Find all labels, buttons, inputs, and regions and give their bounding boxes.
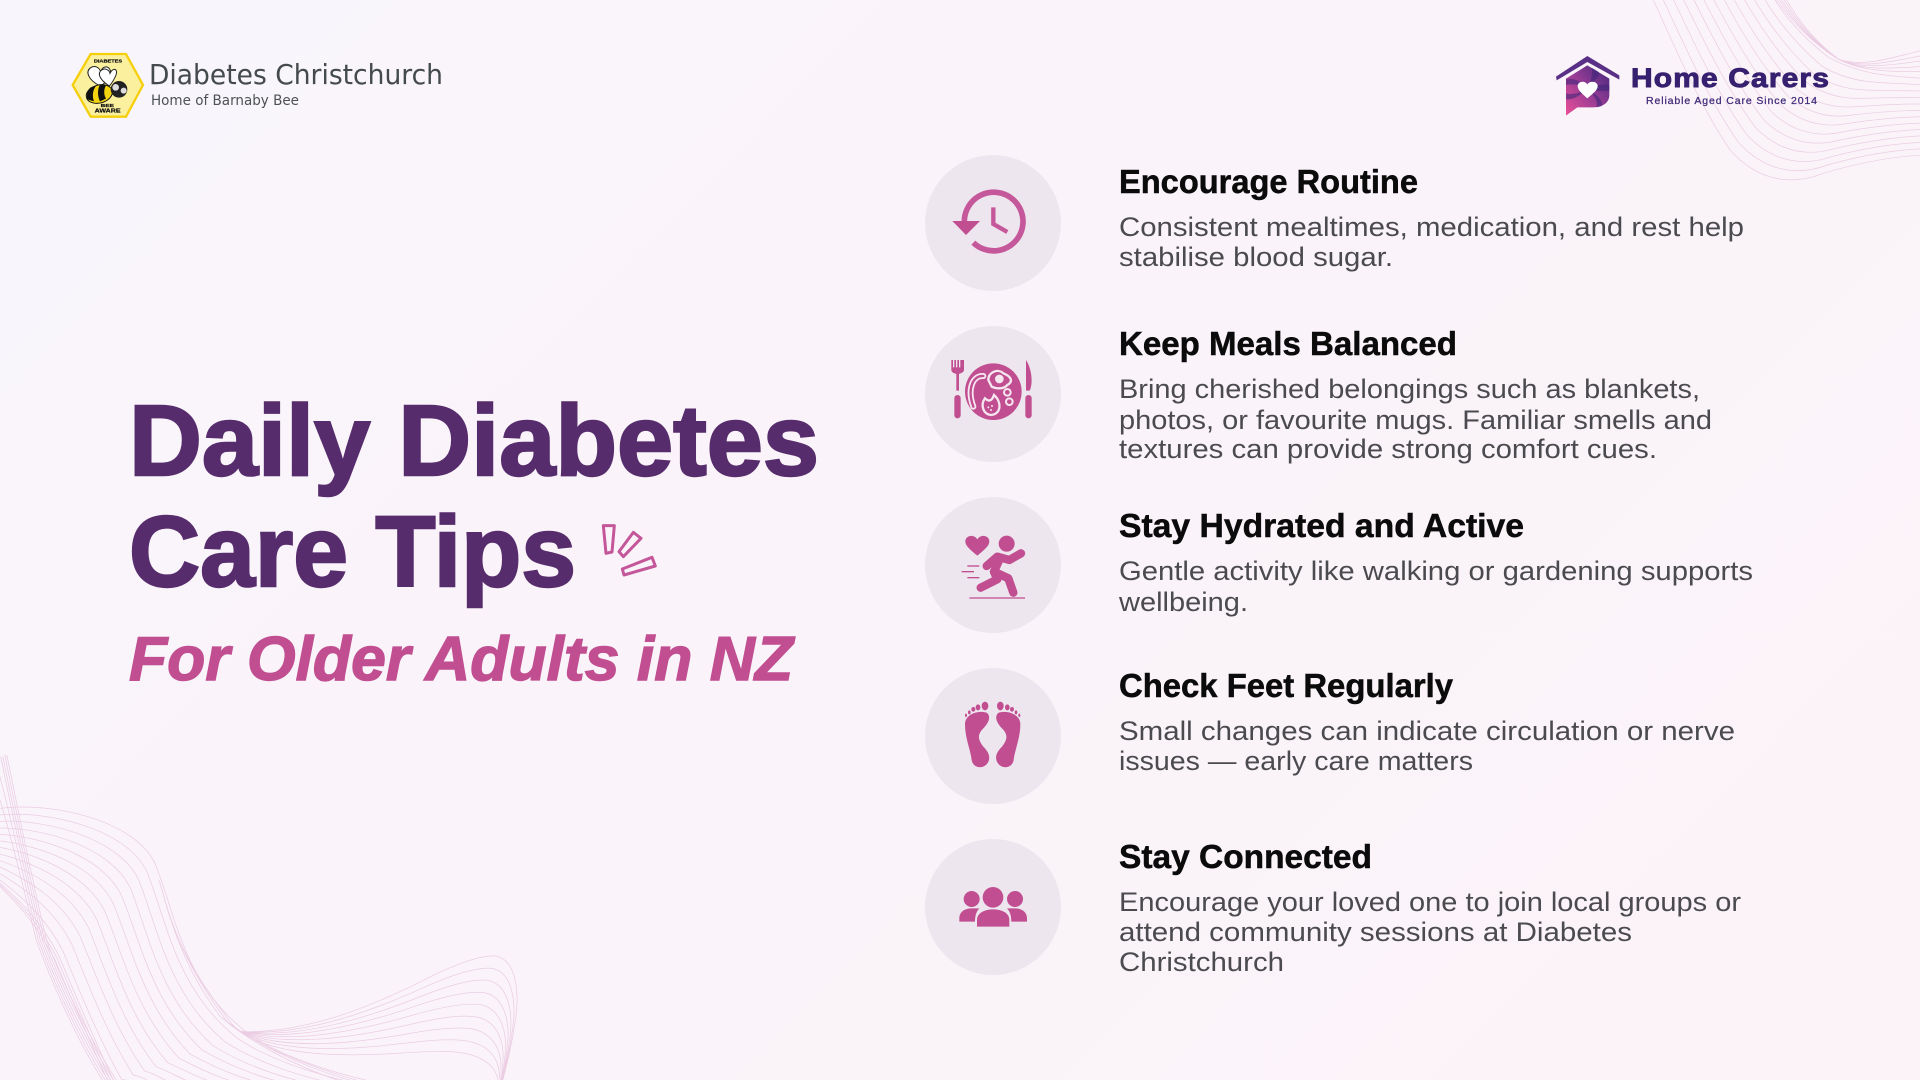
body text: issues — early care matters <box>1119 746 1473 776</box>
heading: Encourage Routine <box>1119 163 1418 200</box>
body text: Small changes can indicate circulation or nerve <box>1119 716 1735 746</box>
body text: Christchurch <box>1119 947 1284 977</box>
body text <box>1119 716 1735 776</box>
icon: group of people <box>925 839 1061 975</box>
title: Care Tips <box>129 496 576 608</box>
logo: Home Carers <box>1556 56 1830 116</box>
icon: runner with heart <box>925 497 1061 633</box>
icon: bee hexagon badge: AWARE <box>95 109 121 115</box>
background wave: bottom left <box>0 755 517 1080</box>
body text: Consistent mealtimes, medication, and rest help <box>1119 212 1744 242</box>
heading: Check Feet Regularly <box>1119 667 1454 704</box>
body text <box>1119 887 1741 977</box>
panel: stay hydrated and active <box>925 497 1753 633</box>
body text: stabilise blood sugar. <box>1119 242 1393 272</box>
heading: Keep Meals Balanced <box>1119 325 1457 362</box>
body text: photos, or favourite mugs. Familiar smells and <box>1119 405 1712 435</box>
icon: footprints <box>925 668 1061 804</box>
icon: plate with cutlery <box>925 326 1061 462</box>
title: Daily Diabetes <box>129 385 819 497</box>
panel: stay connected <box>925 838 1741 977</box>
icon: bee hexagon badge: DIABETES <box>94 59 123 65</box>
icon: sparkle accent <box>603 526 655 575</box>
panel: encourage routine <box>925 155 1744 291</box>
body text: Encourage your loved one to join local groups or <box>1119 887 1741 917</box>
heading: Stay Connected <box>1119 838 1372 875</box>
background wave: top right <box>1653 0 1920 180</box>
body text <box>1118 556 1753 617</box>
logo: Diabetes Christchurch <box>73 54 443 117</box>
body text <box>1119 374 1712 464</box>
body text: textures can provide strong comfort cues. <box>1119 434 1657 464</box>
panel: keep meals balanced <box>925 325 1712 464</box>
logo tagline: Reliable Aged Care Since 2014 <box>1646 95 1817 107</box>
body text: Bring cherished belongings such as blankets, <box>1119 374 1700 404</box>
subtitle: For Older Adults in NZ <box>129 625 795 694</box>
logo name: Home Carers <box>1631 63 1830 93</box>
icon: clock history <box>925 155 1061 291</box>
body text: wellbeing. <box>1118 587 1248 617</box>
body text: attend community sessions at Diabetes <box>1119 917 1632 947</box>
panel: check feet regularly <box>925 667 1735 804</box>
logo tagline: Home of Barnaby Bee <box>151 93 299 109</box>
title <box>129 385 819 608</box>
logo name: Diabetes Christchurch <box>149 58 443 91</box>
body text <box>1119 212 1744 272</box>
icon: bee hexagon badge: BEE <box>101 103 114 108</box>
icon: house with heart <box>1556 56 1619 116</box>
heading: Stay Hydrated and Active <box>1119 507 1524 544</box>
icon: bee hexagon badge <box>73 54 143 117</box>
body text: Gentle activity like walking or gardening supports <box>1119 556 1753 586</box>
